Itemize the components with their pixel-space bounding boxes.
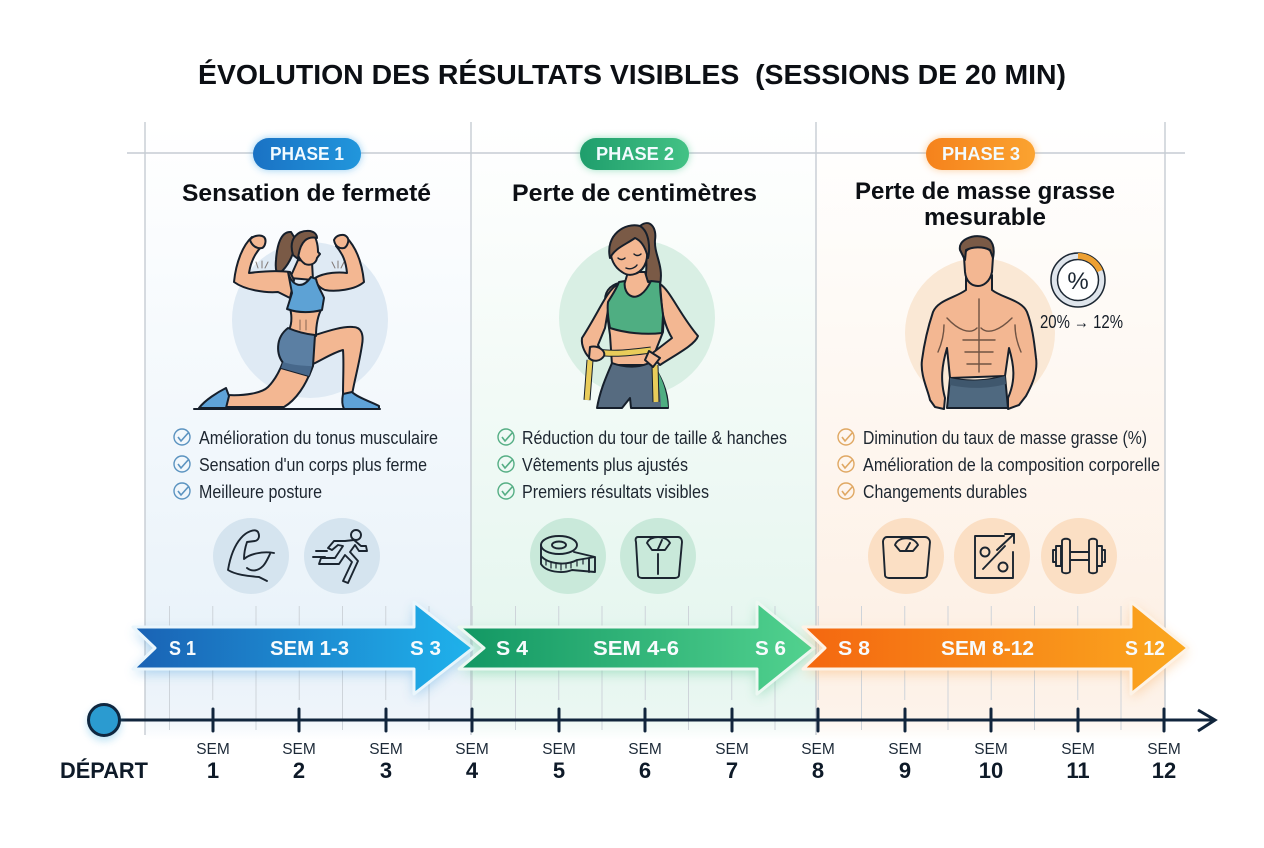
icon: dumbbell <box>1041 518 1117 594</box>
phase 3 illustration: fit man <box>905 236 1123 409</box>
panel background: phase 1 <box>145 122 471 740</box>
phase 2 illustration: woman measuring waist <box>559 223 715 408</box>
week labels: 4 <box>466 758 479 783</box>
arrow: weeks 4-6: S 6 <box>755 638 786 660</box>
phase 2 heading: Perte de centimètres <box>512 180 757 207</box>
week labels: SEM <box>974 741 1008 758</box>
phase 3 heading: Perte de masse grasse <box>855 178 1115 205</box>
panel: phase 3 <box>816 122 1165 740</box>
title: ÉVOLUTION DES RÉSULTATS VISIBLES (SESSIONS DE 20 MIN) <box>198 59 1066 90</box>
week labels: 2 <box>293 758 305 783</box>
panel: phase 2 <box>471 122 816 740</box>
body fat gauge: % <box>1067 268 1089 295</box>
arrow: weeks 1-3 <box>133 602 473 698</box>
week labels: 1 <box>207 758 219 783</box>
week labels: 10 <box>979 758 1003 783</box>
week labels: 7 <box>726 758 738 783</box>
timeline axis <box>118 709 1215 731</box>
week labels: SEM <box>455 741 489 758</box>
week labels: SEM <box>1147 741 1181 758</box>
week labels: 3 <box>380 758 392 783</box>
arrow: weeks 4-6: SEM 4-6 <box>593 638 679 660</box>
arrow: weeks 1-3: S 1 <box>169 638 196 660</box>
arrow: weeks 4-6: S 4 <box>496 638 529 660</box>
week labels: 5 <box>553 758 565 783</box>
arrow: weeks 1-3: SEM 1-3 <box>270 638 349 660</box>
panel background: phase 3 <box>816 122 1165 740</box>
phase 1 heading: Sensation de fermeté <box>182 180 431 207</box>
bullet: tonus: Amélioration du tonus musculaire <box>199 428 438 448</box>
panel background: phase 2 <box>471 122 816 740</box>
bullet: premiers résultats: Premiers résultats visibles <box>522 482 709 502</box>
week labels: SEM <box>196 741 230 758</box>
phase 2 badge: PHASE 2 <box>596 144 674 164</box>
week labels: SEM <box>369 741 403 758</box>
icon: flexed arm <box>213 518 289 594</box>
icon: measuring tape <box>530 518 606 594</box>
week labels <box>196 741 1181 783</box>
week labels: 11 <box>1066 758 1090 783</box>
bullet: tour de taille: Réduction du tour de taille & hanches <box>522 428 787 448</box>
week labels: 9 <box>899 758 911 783</box>
phase 3 heading <box>855 178 1115 231</box>
bullet: durables: Changements durables <box>863 482 1027 502</box>
week labels: SEM <box>282 741 316 758</box>
bullet: composition: Amélioration de la composition corporelle <box>863 455 1160 475</box>
phase 1 illustration: woman flexing <box>194 231 388 409</box>
icon: percentage box <box>954 518 1030 594</box>
icon: runner <box>304 518 380 594</box>
panel: phase 1 <box>145 122 471 740</box>
phase 1 bullet list <box>174 428 438 502</box>
icon: scale <box>868 518 944 594</box>
phase 2 badge <box>580 138 689 170</box>
bullet: vêtements: Vêtements plus ajustés <box>522 455 688 475</box>
arrow: weeks 8-12: SEM 8-12 <box>941 638 1034 660</box>
phase 3 badge: PHASE 3 <box>942 144 1020 164</box>
arrow: weeks 1-3: S 3 <box>410 638 441 660</box>
arrow: weeks 8-12 <box>803 602 1188 698</box>
week labels: 6 <box>639 758 651 783</box>
arrow: weeks 8-12: S 12 <box>1125 638 1165 660</box>
bullet: corps ferme: Sensation d'un corps plus ferme <box>199 455 427 475</box>
phase 1 badge <box>253 138 361 170</box>
week labels: 8 <box>812 758 824 783</box>
arrow: weeks 4-6 <box>459 602 814 698</box>
phase 2 bullet list <box>498 428 787 502</box>
week labels: SEM <box>801 741 835 758</box>
arrow: weeks 8-12: S 8 <box>838 638 870 660</box>
bullet: posture: Meilleure posture <box>199 482 322 502</box>
phase 3 badge <box>926 138 1035 170</box>
week labels: SEM <box>1061 741 1095 758</box>
phase 3 bullet list <box>838 428 1160 502</box>
phase 1 badge: PHASE 1 <box>270 144 344 164</box>
start label: DÉPART <box>60 758 149 783</box>
week labels: SEM <box>715 741 749 758</box>
phase 3 heading: mesurable <box>924 204 1046 231</box>
bullet: masse grasse: Diminution du taux de masse grasse (%) <box>863 428 1147 448</box>
start marker <box>87 704 121 741</box>
body fat change: 20% → 12% <box>1040 312 1123 332</box>
week labels: SEM <box>628 741 662 758</box>
week labels: 12 <box>1152 758 1176 783</box>
body fat gauge <box>1051 253 1105 307</box>
week labels: SEM <box>888 741 922 758</box>
icon: bathroom scale <box>620 518 696 594</box>
week labels: SEM <box>542 741 576 758</box>
